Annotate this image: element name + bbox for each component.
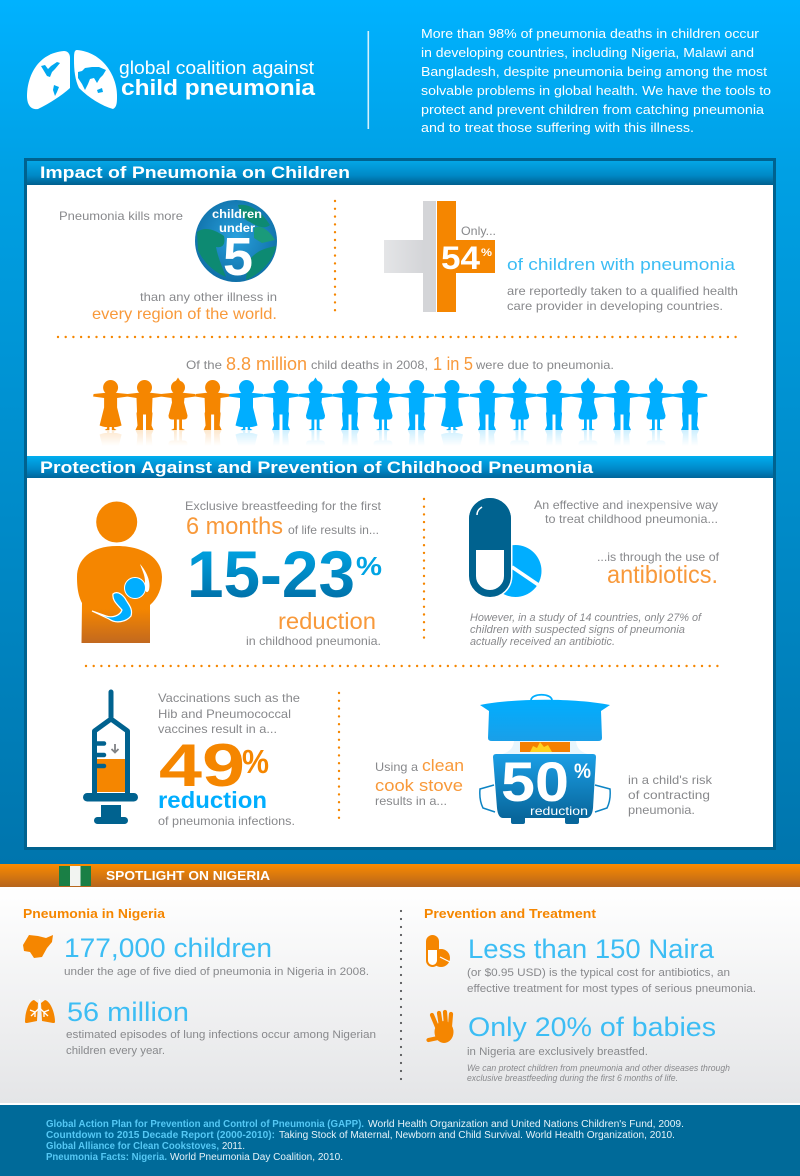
intro paragraph: Bangladesh, despite pneumonia being among the most bbox=[421, 64, 767, 79]
stat: less than 150 naira: Less than 150 Naira bbox=[468, 934, 715, 964]
text: vaccinations 49% bbox=[158, 691, 300, 828]
text: references: Pneumonia Facts: Nigeria. bbox=[46, 1152, 167, 1163]
icon: syringe bbox=[83, 692, 138, 824]
text: antibiotics: An effective and inexpensive way bbox=[534, 498, 718, 512]
text: references: World Pneumonia Day Coalition, 2010. bbox=[170, 1152, 343, 1163]
text: breastfeeding 15-23%: in childhood pneumonia. bbox=[246, 634, 381, 648]
icon: globe children under 5: under bbox=[219, 223, 256, 235]
text: 8.8 million child deaths: 8.8 million bbox=[226, 354, 307, 374]
intro paragraph: solvable problems in global health. We have the tools to bbox=[421, 83, 771, 98]
text: breastfeeding 15-23%: 6 months bbox=[186, 513, 283, 540]
icon: medical cross 54%: 54 bbox=[441, 240, 480, 276]
text: 8.8 million child deaths: 1 in 5 bbox=[433, 354, 473, 374]
heading: impact bbox=[27, 161, 773, 185]
text: references bbox=[46, 1119, 684, 1163]
icon: medical cross 54%: Only... bbox=[461, 224, 496, 238]
text: antibiotics: actually received an antibiotic. bbox=[470, 636, 615, 648]
text: antibiotics: ...is through the use of bbox=[597, 550, 720, 564]
heading: prevention and treatment: Prevention and Treatment bbox=[424, 906, 597, 921]
text: vaccinations 49%: vaccines result in a... bbox=[158, 722, 277, 736]
text: clean cook stove: results in a... bbox=[375, 794, 447, 808]
chart: row of 18 children, 4 highlighted bbox=[93, 378, 708, 444]
text: clean cook stove bbox=[375, 756, 464, 808]
text: 8.8 million child deaths: were due to pneumonia. bbox=[475, 358, 614, 372]
icon: clean cook stove 50%: % bbox=[574, 760, 591, 783]
text: antibiotics: children with suspected signs of pneumonia bbox=[470, 624, 685, 636]
text: breastfeeding 15-23%: of life results in... bbox=[288, 523, 379, 537]
stat: 177,000 children: under the age of five died of pneumonia in Nigeria in 2008. bbox=[64, 966, 369, 978]
heading: pneumonia in nigeria: Pneumonia in Nigeria bbox=[23, 906, 166, 921]
icon: lungs with world map bbox=[27, 50, 117, 109]
stat: less than 150 naira bbox=[467, 934, 756, 995]
text: references: Global Alliance for Clean Cookstoves, bbox=[46, 1141, 219, 1152]
text: references: World Health Organization and United Nations Children's Fund, 2009. bbox=[368, 1119, 684, 1130]
icon: clean cook stove 50%: reduction bbox=[530, 804, 588, 818]
panel: impact of pneumonia on children bbox=[27, 161, 773, 482]
stat: 56 million: estimated episodes of lung infections occur among Nigerian bbox=[66, 1029, 376, 1041]
text: than any other illness: than any other illness in bbox=[140, 290, 277, 304]
text: clean cook stove: Using a bbox=[375, 760, 418, 774]
icon: clean cook stove 50% bbox=[480, 695, 610, 824]
stat: 177,000 children bbox=[64, 933, 369, 978]
page background bbox=[0, 0, 800, 864]
icon: orange hand bbox=[428, 1012, 454, 1043]
text: breastfeeding 15-23%: % bbox=[356, 551, 382, 581]
logo bbox=[27, 50, 316, 109]
heading: protection bbox=[27, 456, 773, 478]
stat: only 20% of babies: Only 20% of babies bbox=[468, 1012, 716, 1042]
icon: medical cross 54% bbox=[384, 201, 496, 312]
icon: orange capsule bbox=[427, 936, 450, 967]
icon: antibiotic capsule and pill bbox=[469, 498, 542, 597]
text: of children with pneumonia bbox=[507, 255, 738, 313]
icon: globe children under 5: children bbox=[212, 209, 262, 221]
icon: globe children under 5 bbox=[195, 200, 277, 287]
text: 8.8 million child deaths: child deaths in 2008, bbox=[311, 358, 428, 372]
text: than any other illness: every region of the world. bbox=[92, 306, 277, 323]
text: references: Global Action Plan for Prevention and Control of Pneumonia (GAPP). bbox=[46, 1119, 364, 1130]
panel: spotlight on nigeria bbox=[0, 864, 800, 1103]
text: vaccinations 49%: Vaccinations such as the bbox=[158, 691, 300, 705]
panel: sources footer bbox=[0, 1105, 800, 1176]
text: antibiotics: antibiotics. bbox=[607, 561, 718, 589]
intro paragraph bbox=[421, 26, 771, 135]
text: breastfeeding 15-23%: 15-23 bbox=[187, 537, 355, 611]
icon: breastfeeding mother bbox=[77, 502, 162, 643]
text: child's risk bbox=[628, 773, 713, 817]
stat: only 20% of babies bbox=[467, 1012, 730, 1083]
text: pneumonia kills more: Pneumonia kills more bbox=[59, 209, 183, 223]
text: vaccinations 49%: Hib and Pneumococcal bbox=[158, 707, 291, 721]
text: 8.8 million child deaths bbox=[186, 354, 614, 374]
text: references: 2011. bbox=[222, 1141, 245, 1152]
stat: 56 million bbox=[66, 997, 376, 1057]
icon: clean cook stove 50%: 50 bbox=[501, 750, 569, 813]
text: vaccinations 49%: reduction bbox=[158, 787, 267, 813]
text: vaccinations 49%: of pneumonia infections. bbox=[158, 814, 295, 828]
stat: less than 150 naira: (or $0.95 USD) is the typical cost for antibiotics, an bbox=[467, 967, 730, 979]
logo text: global coalition against bbox=[119, 57, 314, 78]
heading: spotlight bar: SPOTLIGHT ON NIGERIA bbox=[106, 868, 271, 883]
icon: globe children under 5: 5 bbox=[223, 227, 253, 287]
text: breastfeeding 15-23%: Exclusive breastfeeding for the first bbox=[185, 499, 382, 513]
heading: protection: Protection Against and Prevention of Childhood Pneumonia bbox=[40, 458, 594, 477]
icon: lungs bbox=[25, 999, 55, 1023]
text: antibiotics bbox=[470, 498, 720, 648]
text: of children with pneumonia: care provider in developing countries. bbox=[507, 299, 723, 313]
intro paragraph: in developing countries, including Nigeria, Malawi and bbox=[421, 45, 754, 60]
icon: nigerian flag bbox=[59, 866, 91, 886]
stat: only 20% of babies: We can protect children from pneumonia and other diseases through bbox=[467, 1063, 730, 1073]
text: clean cook stove: clean bbox=[422, 756, 464, 775]
icon: medical cross 54%: % bbox=[481, 247, 492, 259]
panel frame bbox=[24, 158, 776, 850]
text: child's risk: in a child's risk bbox=[628, 773, 713, 787]
intro paragraph: More than 98% of pneumonia deaths in children occur bbox=[421, 26, 760, 41]
text: child's risk: of contracting bbox=[628, 788, 710, 802]
intro paragraph: protect and prevent children from catching pneumonia bbox=[421, 102, 765, 117]
text: vaccinations 49%: % bbox=[242, 743, 269, 780]
text: references: Taking Stock of Maternal, Newborn and Child Survival. World Health Organization, 2010. bbox=[279, 1130, 675, 1141]
intro paragraph: and to treat those suffering with this illness. bbox=[421, 120, 694, 135]
text: antibiotics: However, in a study of 14 countries, only 27% of bbox=[470, 612, 702, 624]
text: of children with pneumonia: are reportedly taken to a qualified health bbox=[507, 284, 738, 298]
stat: less than 150 naira: effective treatment for most types of serious pneumonia. bbox=[467, 983, 756, 995]
text: of children with pneumonia: of children with pneumonia bbox=[507, 255, 736, 274]
stat: only 20% of babies: exclusive breastfeeding during the first 6 months of life. bbox=[467, 1073, 678, 1083]
panel: protection and prevention bbox=[27, 456, 773, 847]
text: 8.8 million child deaths: Of the bbox=[186, 358, 222, 372]
text: antibiotics: to treat childhood pneumonia... bbox=[545, 512, 718, 526]
text: child's risk: pneumonia. bbox=[628, 803, 695, 817]
stat: only 20% of babies: in Nigeria are exclusively breastfed. bbox=[467, 1046, 648, 1058]
text: vaccinations 49%: 49 bbox=[159, 732, 245, 799]
heading: impact: Impact of Pneumonia on Children bbox=[40, 163, 350, 182]
text: than any other illness bbox=[92, 290, 277, 323]
stat: 56 million: 56 million bbox=[67, 997, 189, 1027]
stat: 177,000 children: 177,000 children bbox=[64, 933, 272, 963]
text: breastfeeding 15-23% bbox=[185, 499, 382, 648]
text: clean cook stove: cook stove bbox=[375, 776, 463, 795]
icon: map of nigeria bbox=[23, 935, 53, 958]
heading: spotlight bar bbox=[0, 864, 800, 887]
logo text: child pneumonia bbox=[121, 75, 316, 100]
text: references: Countdown to 2015 Decade Report (2000-2010): bbox=[46, 1130, 275, 1141]
logo text bbox=[119, 57, 316, 100]
text: breastfeeding 15-23%: reduction bbox=[278, 608, 376, 634]
stat: 56 million: children every year. bbox=[66, 1045, 165, 1057]
